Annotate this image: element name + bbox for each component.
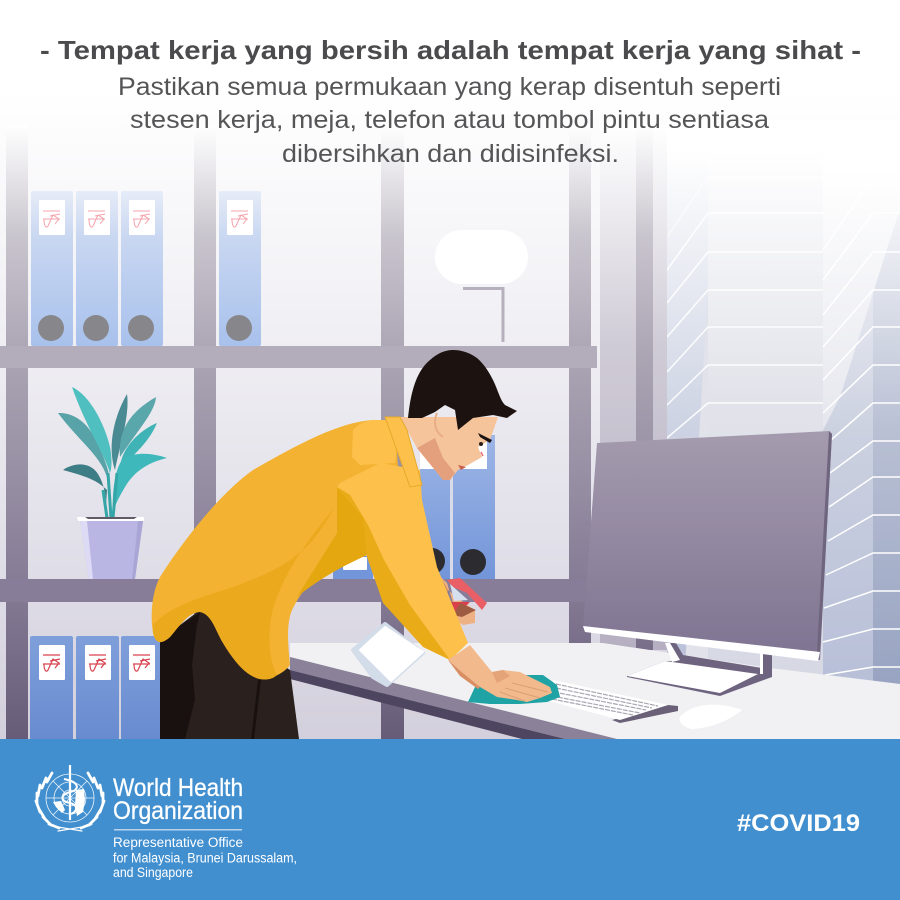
man cleaning desk: [152, 350, 560, 739]
window with building view: [667, 120, 900, 740]
body text: Pastikan semua permukaan yang kerap disentuh seperti: [118, 73, 781, 101]
staff and serpent: [69, 765, 71, 820]
body text: dibersihkan dan didisinfeksi.: [282, 140, 619, 168]
monitor screen: [583, 431, 832, 660]
WHO name: World Health: [113, 774, 243, 802]
shoulder highlight: [352, 420, 400, 465]
cleaning cloth: [468, 675, 560, 704]
hair: [408, 350, 517, 430]
potted plant: [58, 387, 167, 579]
desk: [290, 643, 900, 740]
folders on lower shelf: [30, 636, 161, 740]
office name: Representative Office: [113, 835, 243, 850]
title: - Tempat kerja yang bersih adalah tempat kerja yang sihat -: [40, 35, 861, 65]
neck and face: [400, 413, 498, 480]
mouse: [680, 705, 742, 729]
office name: and Singapore: [113, 865, 193, 880]
back arm and hand holding spray: [430, 567, 487, 625]
WHO emblem: [36, 765, 104, 831]
WHO name: Organization: [113, 797, 243, 825]
monitor stand: [627, 643, 772, 696]
forearm and hand: [448, 645, 552, 702]
globe: [46, 774, 94, 822]
collar: [385, 417, 422, 487]
monitor: [583, 431, 832, 696]
shirt body: [152, 420, 400, 679]
wreath: [36, 773, 104, 831]
shirt underarm shadow: [297, 487, 373, 597]
sleeve shadow: [337, 487, 450, 660]
office name: [113, 835, 297, 880]
folders on upper shelf: [31, 191, 261, 346]
office name: for Malaysia, Brunei Darussalam,: [113, 850, 297, 866]
WHO name: [113, 774, 243, 825]
continents: [53, 789, 85, 816]
folders behind the man: [333, 435, 495, 579]
body text: stesen kerja, meja, telefon atau tombol pintu sentiasa: [130, 106, 769, 134]
shirt folds: [153, 507, 335, 680]
trousers: [160, 610, 299, 739]
body text: [118, 73, 781, 168]
shelving posts: [6, 125, 667, 740]
keyboard: [545, 680, 678, 723]
footer band: [0, 739, 900, 900]
hashtag: #COVID19: [737, 810, 860, 837]
spray bottle: [353, 624, 423, 685]
lamp: [435, 230, 528, 342]
shelves: [0, 346, 597, 602]
yellow sleeve: [337, 463, 468, 660]
